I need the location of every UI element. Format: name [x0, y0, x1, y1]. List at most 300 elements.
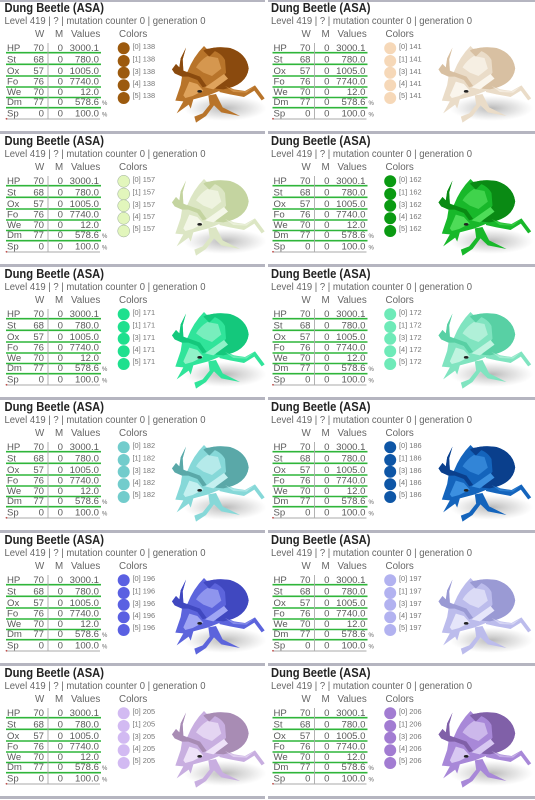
stats table: 3000.1 [336, 708, 366, 719]
stats table: 0 [324, 87, 330, 98]
color swatches: [1] 186 [399, 454, 422, 462]
card separator [0, 264, 265, 267]
stats table: 76 [300, 476, 310, 486]
stats table [272, 428, 374, 519]
stats table: 12.0 [80, 353, 99, 364]
color swatches: [5] 186 [399, 490, 422, 499]
stats table: HP [7, 708, 20, 719]
color swatches: [1] 162 [399, 188, 422, 196]
stats table: 0 [324, 230, 330, 241]
stats table: 0 [324, 54, 330, 66]
stats table: Fo [274, 76, 285, 88]
stats table: 0 [58, 508, 63, 518]
stats table: 57 [300, 465, 310, 476]
color swatches: [3] 138 [132, 67, 155, 76]
beetle illustration [172, 46, 267, 123]
stats table: W [35, 694, 45, 705]
stats table: % [368, 246, 374, 252]
stats table: 7740.0 [336, 742, 366, 752]
stats table: 0 [58, 66, 63, 77]
stats table: W [35, 295, 45, 306]
stats table: 0 [305, 774, 310, 784]
stats table: 0 [324, 629, 330, 640]
stats table: 0 [324, 108, 330, 120]
stats table: 7740.0 [70, 342, 99, 354]
color swatches: [4] 196 [132, 611, 155, 620]
stats table: 70 [33, 708, 44, 719]
stats table: 100.0 [341, 640, 366, 652]
stats table: Fo [274, 742, 285, 752]
subtitle: Level 419 | ? | mutation counter 0 | generation 0 [271, 149, 473, 160]
stats table: St [274, 188, 283, 198]
stats table: HP [7, 176, 20, 187]
stats table: 100.0 [341, 108, 366, 120]
stats table: 70 [300, 220, 310, 231]
stats table: 70 [300, 176, 310, 187]
subtitle: Level 419 | ? | mutation counter 0 | generation 0 [4, 149, 206, 160]
stats table: 77 [33, 363, 44, 374]
stats table: 3000.1 [70, 442, 99, 453]
title: Dung Beetle (ASA) [271, 1, 370, 15]
stats table: 0 [39, 774, 44, 784]
stats table: 12.0 [347, 619, 366, 630]
stats table: 0 [324, 43, 330, 54]
color swatches: [5] 182 [132, 490, 155, 499]
subtitle: Level 419 | ? | mutation counter 0 | generation 0 [271, 548, 473, 559]
stats table: St [7, 320, 16, 332]
stats table: M [322, 295, 330, 306]
stats table: Sp [274, 508, 285, 518]
color swatches: [0] 197 [399, 574, 422, 583]
stats table: 57 [33, 66, 44, 77]
stats table: 68 [33, 586, 44, 598]
beetle illustration [438, 46, 533, 123]
stats table: 780.0 [341, 720, 366, 730]
stats table: 77 [33, 762, 44, 773]
stats table: 68 [300, 54, 310, 66]
stats table: Fo [274, 342, 285, 354]
stats table: We [7, 87, 21, 98]
stats table: 12.0 [347, 752, 366, 763]
stats table: 0 [58, 320, 63, 332]
stats table: W [35, 561, 45, 572]
stats table: 3000.1 [70, 176, 99, 187]
stats table: 0 [58, 87, 63, 98]
color swatches: [1] 172 [399, 320, 422, 330]
stats table: Dm [7, 762, 22, 773]
stats table: 100.0 [75, 640, 99, 652]
stats table: HP [274, 442, 287, 453]
stats table: 100.0 [341, 242, 366, 252]
stats table: 0 [58, 374, 63, 386]
color swatches: [4] 186 [399, 478, 422, 487]
stats table [272, 561, 374, 652]
beetle illustration [172, 578, 267, 655]
stats table: 578.6 [75, 230, 99, 241]
stats table [6, 295, 108, 386]
stats table: 0 [58, 76, 63, 88]
stats table: 12.0 [80, 752, 99, 763]
stats table: 0 [58, 708, 63, 719]
stats table: 0 [324, 586, 330, 598]
title: Dung Beetle (ASA) [271, 533, 370, 547]
stats table: 0 [58, 108, 63, 120]
stats table: % [368, 766, 374, 772]
stats table: 76 [33, 742, 44, 752]
card: color 205 [0, 666, 267, 798]
color swatches: [5] 196 [132, 623, 155, 632]
stats table: 70 [33, 619, 44, 630]
stats table: Dm [274, 629, 288, 640]
stats table: Ox [7, 332, 19, 343]
stats table: M [55, 295, 63, 306]
subtitle: Level 419 | ? | mutation counter 0 | generation 0 [4, 681, 206, 692]
stats table: 70 [300, 619, 310, 630]
stats table [272, 29, 374, 120]
stats table: 57 [33, 731, 44, 742]
card: color 186 [268, 400, 535, 532]
stats table: 12.0 [347, 87, 366, 98]
stats table: HP [274, 309, 287, 320]
stats table: 100.0 [75, 508, 99, 518]
color swatches: [3] 182 [132, 466, 155, 475]
stats table: Sp [7, 508, 19, 518]
stats table: 3000.1 [336, 43, 366, 54]
color swatches: [1] 197 [399, 586, 422, 596]
stats table: 578.6 [341, 629, 366, 640]
stats table: % [368, 112, 374, 118]
stats table: 68 [300, 454, 310, 464]
color swatches: [1] 141 [399, 54, 422, 64]
stats table [272, 694, 374, 785]
stats table: 0 [324, 363, 330, 374]
stats table: Sp [274, 242, 285, 252]
stats table: % [102, 378, 108, 384]
subtitle: Level 419 | ? | mutation counter 0 | generation 0 [271, 681, 473, 692]
stats table: M [55, 561, 63, 572]
stats table: St [7, 54, 16, 66]
card: color 196 [0, 533, 267, 664]
stats table: Ox [7, 598, 19, 609]
beetle illustration [438, 312, 533, 389]
stats table: 0 [324, 442, 330, 453]
stats table: Dm [274, 97, 288, 108]
stats table: 0 [58, 619, 63, 630]
stats table: 7740.0 [70, 742, 99, 752]
color swatches: [3] 171 [132, 333, 155, 342]
stats table: 0 [58, 43, 63, 54]
stats table: 7740.0 [70, 76, 99, 88]
stats table: 0 [324, 575, 330, 586]
stats table: Fo [274, 608, 285, 620]
stats table: 780.0 [341, 586, 366, 598]
stats table: 0 [324, 619, 330, 630]
stats table: 780.0 [341, 188, 366, 198]
stats table: 0 [58, 210, 63, 220]
stats table: 100.0 [75, 108, 99, 120]
color swatches: [5] 141 [399, 91, 422, 100]
stats table: 0 [58, 629, 63, 640]
color swatches: [1] 196 [132, 586, 155, 596]
stats table: St [7, 188, 16, 198]
stats table: 578.6 [341, 762, 366, 773]
card separator [268, 796, 535, 799]
color swatches [118, 162, 155, 237]
stats table: Values [71, 295, 100, 306]
stats table: 76 [300, 210, 310, 220]
stats table: Values [71, 162, 100, 173]
subtitle: Level 419 | ? | mutation counter 0 | generation 0 [4, 548, 206, 559]
stats table: 0 [324, 332, 330, 343]
stats table: 1005.0 [70, 731, 99, 742]
stats table: % [102, 101, 108, 107]
color swatches: [3] 205 [132, 732, 155, 741]
stats table: 70 [300, 43, 310, 54]
stats table: St [7, 454, 16, 464]
stats table: 0 [305, 242, 310, 252]
stats table: Sp [274, 374, 285, 386]
stats table: 70 [300, 353, 310, 364]
stats table: % [102, 512, 108, 518]
stats table: 3000.1 [70, 43, 99, 54]
stats table: Values [71, 428, 100, 439]
card: color 157 [0, 134, 267, 266]
stats table: 57 [33, 465, 44, 476]
color swatches: [4] 197 [399, 611, 422, 620]
stats table: Sp [274, 640, 285, 652]
color swatches: [0] 141 [399, 42, 422, 51]
stats table: 77 [33, 496, 44, 507]
color swatches: Colors [119, 694, 147, 705]
stats table: 100.0 [75, 242, 99, 252]
stats table: Values [338, 162, 367, 173]
stats table: 77 [33, 97, 44, 108]
stats table [272, 295, 374, 386]
stats table [6, 162, 108, 253]
stats table: 7740.0 [336, 476, 366, 486]
stats table: % [102, 633, 108, 639]
stats table: 68 [33, 188, 44, 198]
stats table: % [368, 378, 374, 384]
stats table: Sp [7, 640, 19, 652]
stats table: 0 [324, 720, 330, 730]
stats table: Ox [274, 465, 286, 476]
stats table: Sp [7, 108, 19, 120]
stats table: 76 [300, 342, 310, 354]
stats table: Values [338, 428, 367, 439]
stats table: 7740.0 [70, 476, 99, 486]
stats table: 7740.0 [336, 210, 366, 220]
beetle illustration [438, 711, 533, 788]
subtitle: Level 419 | ? | mutation counter 0 | generation 0 [271, 415, 473, 426]
stats table: We [7, 353, 21, 364]
stats table: Dm [7, 363, 22, 374]
stats table: We [274, 220, 288, 231]
card: color 182 [0, 400, 267, 532]
stats table: W [302, 162, 312, 173]
stats table: 0 [58, 230, 63, 241]
stats table: % [368, 512, 374, 518]
stats table: Values [71, 561, 100, 572]
stats table: 0 [58, 742, 63, 752]
stats table: 0 [39, 374, 44, 386]
card separator [268, 397, 535, 400]
stats table: 0 [58, 242, 63, 252]
stats table: 0 [58, 353, 63, 364]
stats table: 0 [324, 742, 330, 752]
stats table: Ox [274, 731, 286, 742]
stats table: W [35, 162, 45, 173]
stats table: 12.0 [80, 619, 99, 630]
stats table: M [55, 29, 63, 40]
stats table: 0 [324, 353, 330, 364]
stats table: Dm [7, 496, 22, 507]
stats table: 0 [58, 762, 63, 773]
stats table: M [322, 162, 330, 173]
stats table: Fo [274, 210, 285, 220]
stats table: 70 [300, 87, 310, 98]
color swatches: Colors [119, 428, 147, 439]
stats table: 77 [300, 629, 310, 640]
color swatches [118, 295, 155, 370]
card: color 138 [0, 0, 267, 132]
stats table: 70 [300, 442, 310, 453]
stats table: 0 [305, 374, 310, 386]
stats table: 68 [300, 586, 310, 598]
color swatches: [4] 171 [132, 345, 155, 354]
stats table: Values [338, 29, 367, 40]
color swatches: Colors [119, 561, 147, 572]
color swatches: [0] 206 [399, 707, 422, 716]
stats table: 77 [300, 230, 310, 241]
stats table: St [7, 720, 16, 730]
stats table: 780.0 [75, 720, 99, 730]
stats table: 0 [324, 508, 330, 518]
color swatches: [4] 206 [399, 744, 422, 753]
stats table: W [302, 428, 312, 439]
color swatches [384, 162, 422, 237]
stats table: 0 [58, 752, 63, 763]
stats table: 578.6 [75, 762, 99, 773]
stats table: W [302, 295, 312, 306]
beetle illustration [172, 312, 267, 389]
stats table: W [35, 428, 45, 439]
stats table: 578.6 [341, 230, 366, 241]
color swatches: [5] 138 [132, 91, 155, 100]
stats table: 0 [58, 309, 63, 320]
stats table: 3000.1 [336, 442, 366, 453]
stats table: 70 [33, 43, 44, 54]
title: Dung Beetle (ASA) [271, 400, 370, 414]
stats table: Dm [274, 762, 288, 773]
stats table: 68 [33, 320, 44, 332]
stats table: 0 [324, 752, 330, 763]
stats table: M [322, 694, 330, 705]
stats table: 780.0 [75, 320, 99, 332]
stats table: We [274, 87, 288, 98]
stats table: Values [338, 561, 367, 572]
stats table: 100.0 [341, 374, 366, 386]
stats table: M [55, 428, 63, 439]
color swatches: [5] 162 [399, 224, 422, 233]
color swatches: [0] 182 [132, 441, 155, 450]
stats table: % [368, 500, 374, 506]
stats table: Fo [274, 476, 285, 486]
stats table: 77 [300, 762, 310, 773]
stats table: 0 [58, 575, 63, 586]
stats table: 0 [58, 363, 63, 374]
stats table: 76 [33, 76, 44, 88]
stats table: 0 [58, 188, 63, 198]
stats table: We [7, 220, 21, 231]
stats table: 7740.0 [336, 608, 366, 620]
stats table: 0 [58, 465, 63, 476]
stats table: 0 [58, 496, 63, 507]
stats table: 0 [58, 54, 63, 66]
card: color 141 [268, 0, 535, 132]
stats table: 0 [324, 309, 330, 320]
stats table: 76 [300, 608, 310, 620]
card separator [0, 796, 265, 799]
stats table: We [7, 486, 21, 497]
stats table: 780.0 [75, 188, 99, 198]
color swatches: [4] 157 [132, 212, 155, 221]
subtitle: Level 419 | ? | mutation counter 0 | generation 0 [4, 415, 206, 426]
stats table: 578.6 [75, 97, 99, 108]
stats table: Ox [7, 66, 19, 77]
stats table: 57 [300, 332, 310, 343]
stats table: 0 [58, 442, 63, 453]
color swatches: [4] 182 [132, 478, 155, 487]
color swatches: [3] 196 [132, 599, 155, 608]
stats table: HP [7, 575, 20, 586]
stats table: 70 [33, 309, 44, 320]
stats table: 76 [300, 76, 310, 88]
stats table: Values [338, 694, 367, 705]
color swatches: [5] 157 [132, 224, 155, 233]
stats table: 0 [58, 640, 63, 652]
beetle illustration [438, 578, 533, 655]
stats table: 578.6 [75, 629, 99, 640]
subtitle: Level 419 | ? | mutation counter 0 | generation 0 [4, 282, 206, 293]
color swatches [384, 428, 422, 503]
card separator [0, 663, 265, 666]
stats table: Dm [7, 97, 22, 108]
stats table: 100.0 [341, 774, 366, 784]
stats table: 57 [300, 199, 310, 210]
stats table: 68 [300, 720, 310, 730]
stats table: Fo [7, 608, 18, 620]
stats table: 0 [324, 708, 330, 719]
stats table: 77 [300, 97, 310, 108]
stats table: 77 [33, 230, 44, 241]
stats table: St [274, 720, 283, 730]
stats table: Values [71, 29, 100, 40]
stats table: 1005.0 [336, 332, 366, 343]
color swatches: Colors [119, 162, 147, 173]
stats table: We [274, 752, 288, 763]
color swatches: [4] 172 [399, 345, 422, 354]
stats table: 68 [300, 188, 310, 198]
stats table: 0 [58, 220, 63, 231]
stats table: HP [274, 176, 287, 187]
color swatches: [0] 186 [399, 441, 422, 450]
stats table: % [102, 778, 108, 784]
stats table: 0 [305, 508, 310, 518]
stats table: 77 [300, 363, 310, 374]
color swatches: [3] 157 [132, 200, 155, 209]
stats table: St [274, 454, 283, 464]
